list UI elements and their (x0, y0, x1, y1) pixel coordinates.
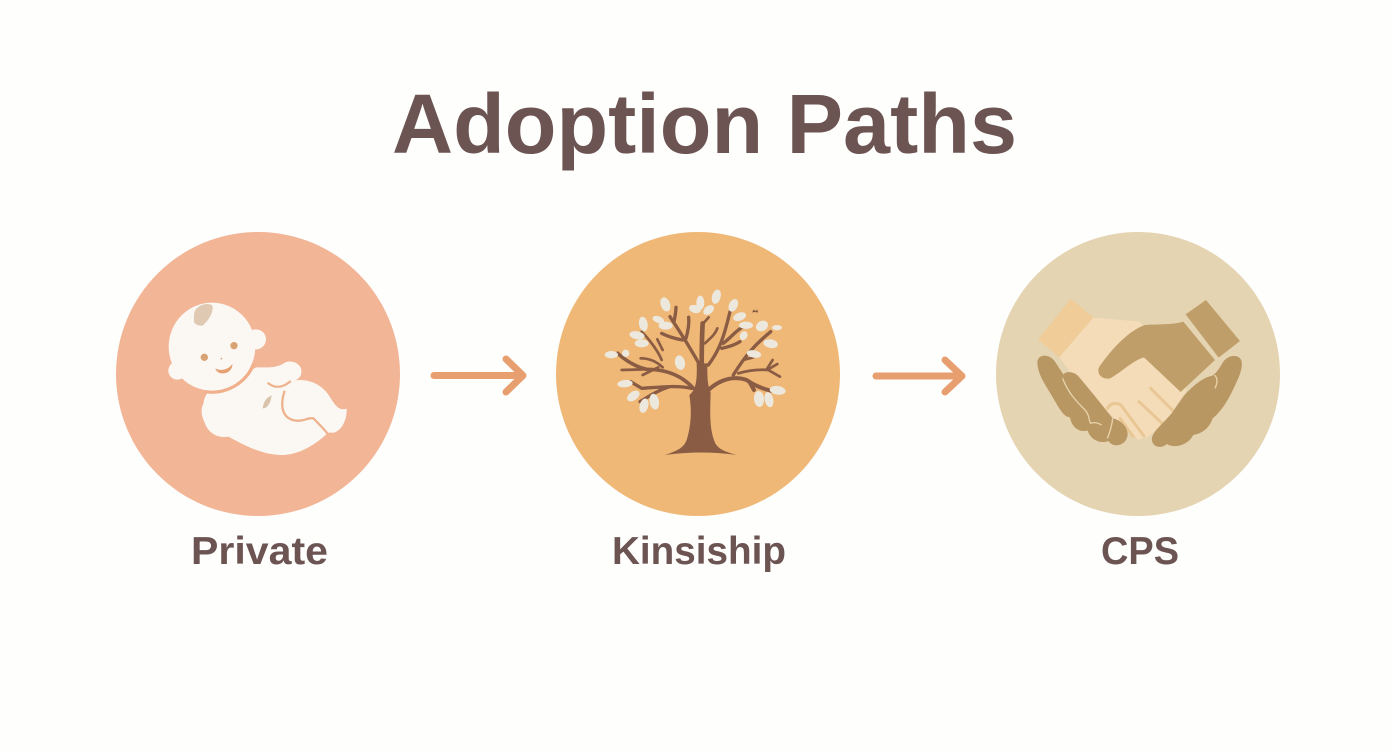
icon: tree (605, 288, 786, 455)
icon: baby (168, 303, 347, 455)
left cupped hand (1037, 356, 1128, 445)
panel: kinship (556, 232, 840, 573)
panel: private (116, 232, 400, 573)
circle: private (116, 232, 400, 516)
label: kinship: Kinsiship (612, 530, 786, 573)
arrow: private to kinship (434, 359, 523, 392)
label: cps: CPS (1101, 530, 1179, 573)
circle: kinship (556, 232, 840, 516)
light cuff (1038, 299, 1093, 357)
circle: cps (996, 232, 1280, 516)
dark cuff (1186, 300, 1240, 358)
light hand (1059, 318, 1187, 440)
right cupped hand (1152, 356, 1242, 447)
label: private: Private (191, 530, 328, 573)
title: Adoption Paths (392, 77, 1017, 171)
dark hand (1098, 322, 1215, 392)
panel: cps (996, 232, 1280, 573)
icon: handshake (1037, 299, 1242, 447)
arrow: kinship to cps (876, 360, 962, 392)
